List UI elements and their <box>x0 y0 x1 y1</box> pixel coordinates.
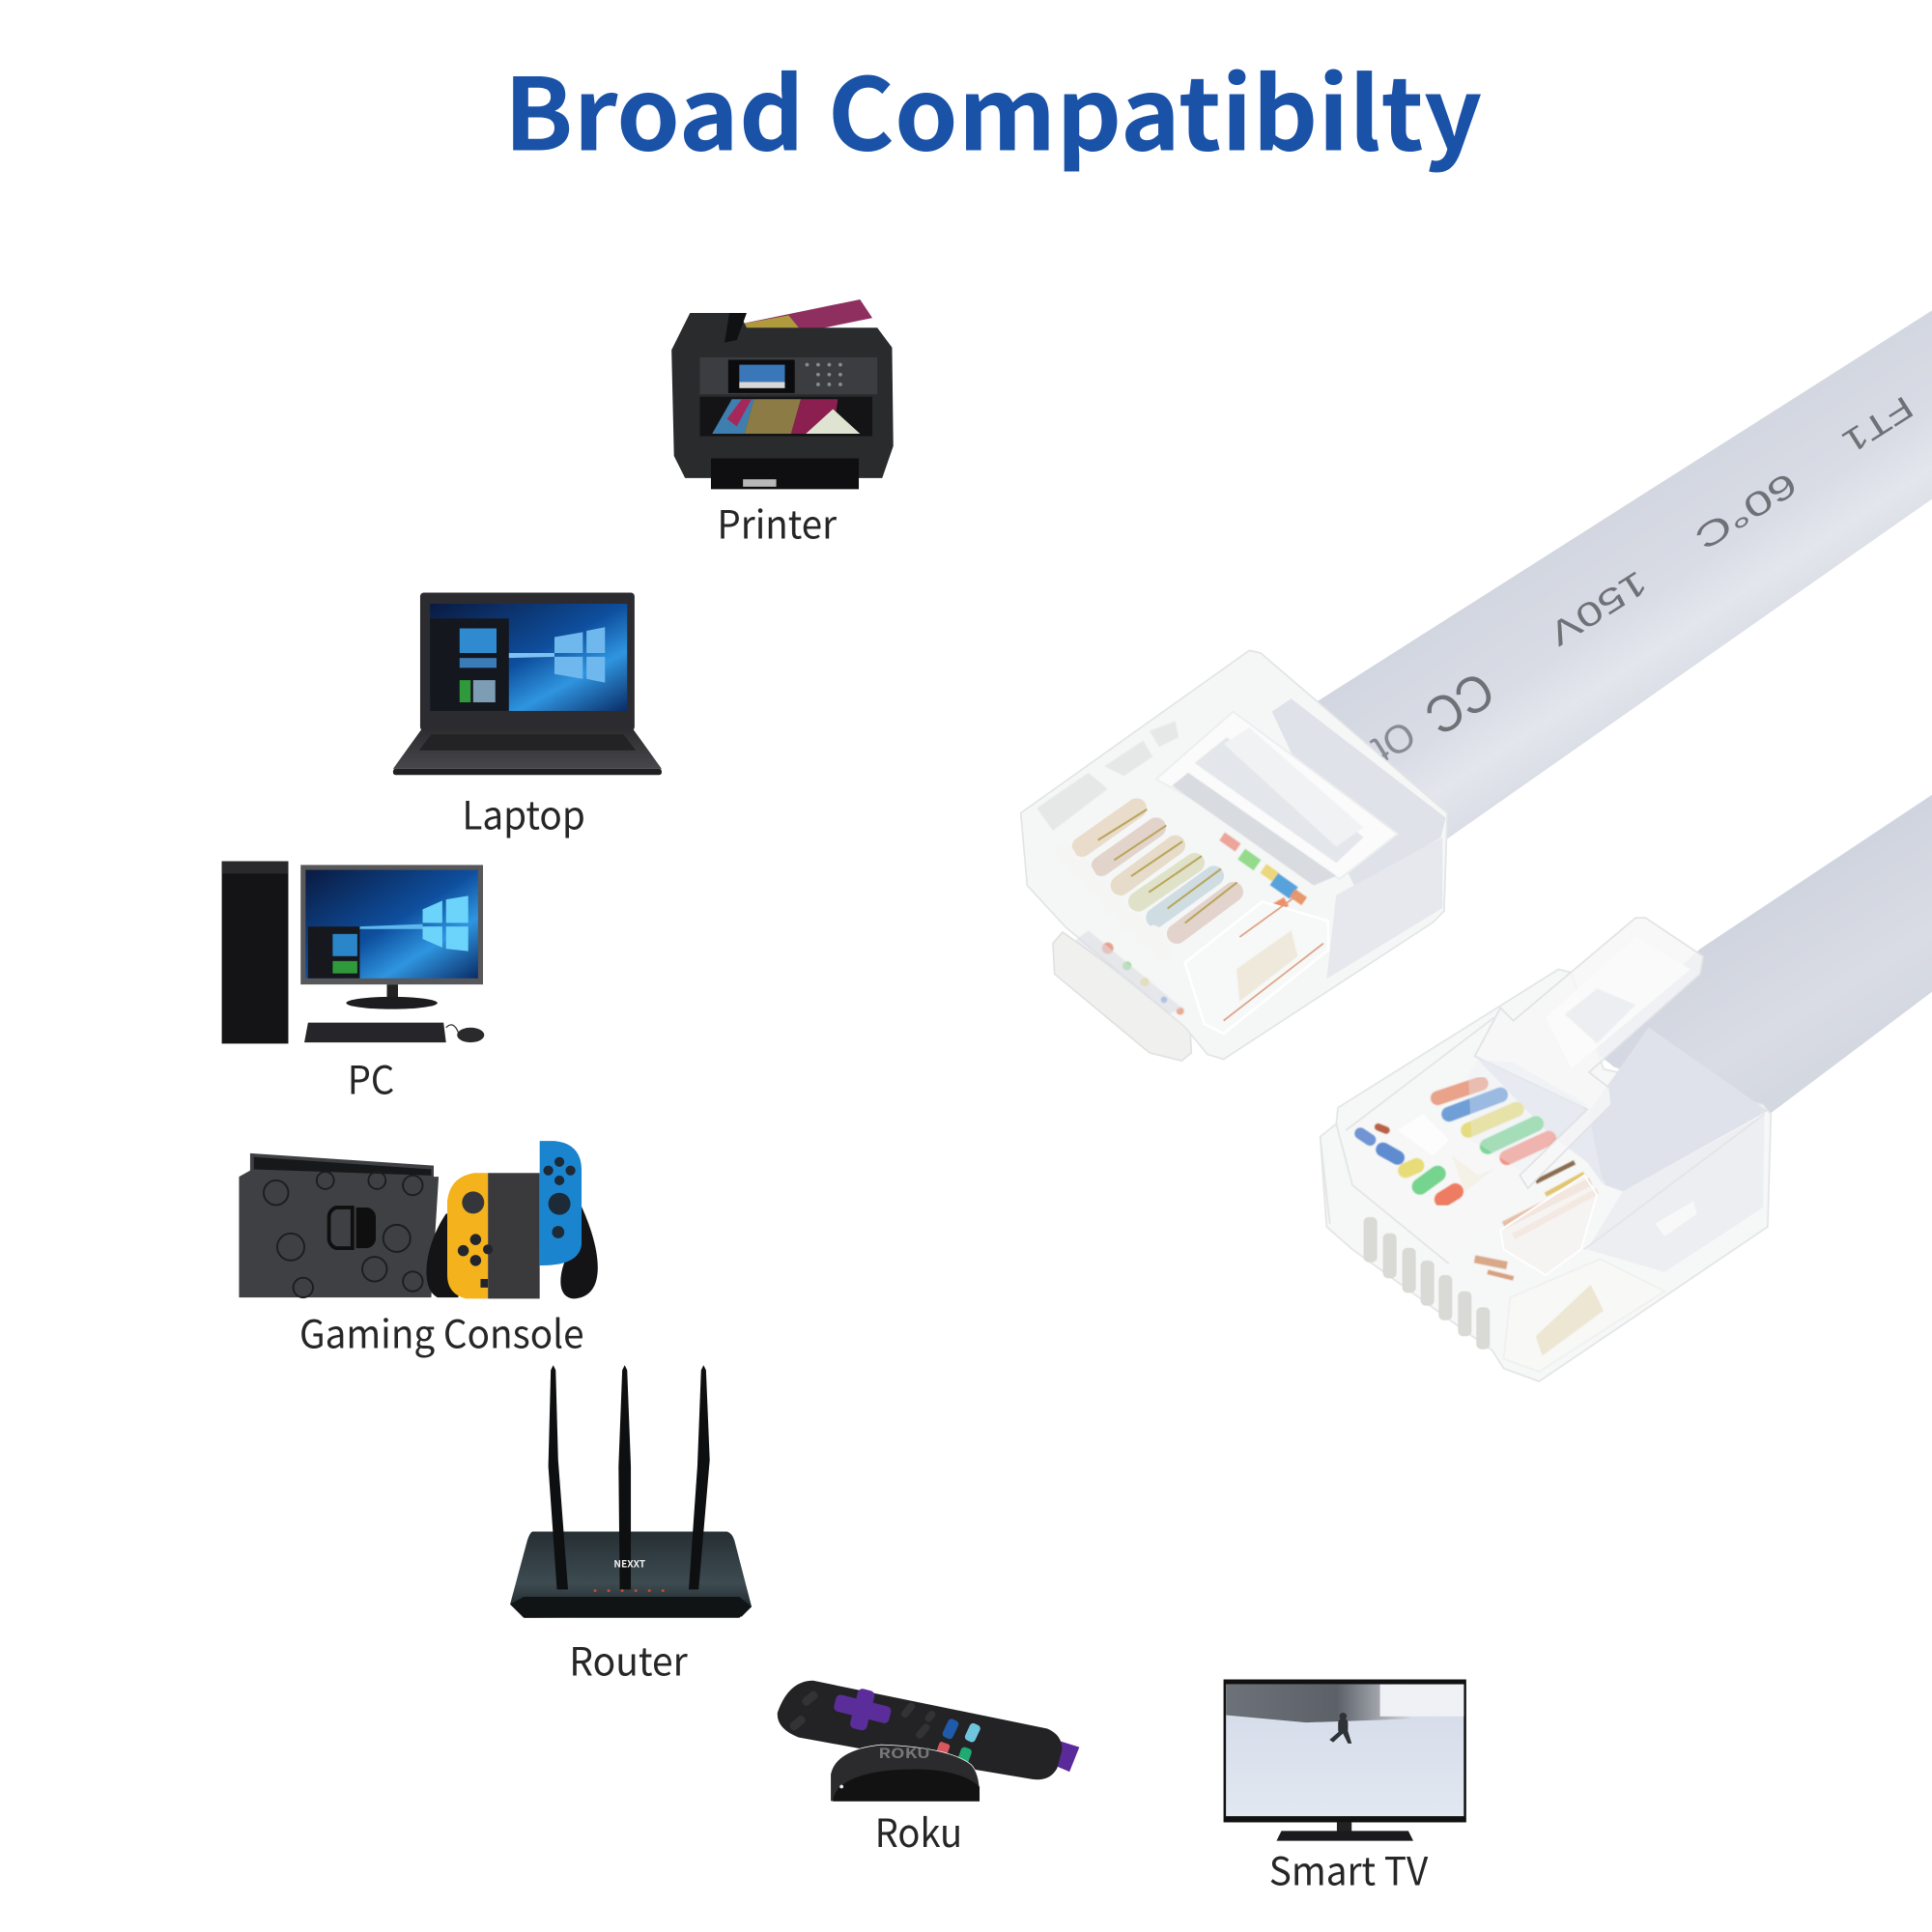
cable printed mark: CC: CC <box>1415 660 1504 745</box>
device: smart tv <box>1224 1680 1466 1897</box>
pc stand <box>387 984 398 1001</box>
console dock <box>239 1153 439 1297</box>
plug latch <box>1475 918 1703 1188</box>
cable printed mark: partly hidden: Ot <box>1364 712 1424 772</box>
cable printed text: 150V: 150V <box>1542 563 1654 652</box>
tv label: Smart TV <box>1269 1840 1429 1897</box>
plug bottom corner <box>1504 1259 1664 1372</box>
pc keyboard <box>304 1023 446 1042</box>
roku remote <box>778 1681 1062 1779</box>
pc tower <box>222 862 288 1043</box>
upper RJ45 plug <box>1021 650 1447 1061</box>
printer body <box>671 313 894 478</box>
console label: Gaming Console <box>299 1302 584 1359</box>
plug outlines <box>1321 1017 1765 1264</box>
console grip left <box>426 1213 458 1297</box>
device: roku: ROKU <box>878 1744 930 1763</box>
router label: Router <box>569 1631 688 1688</box>
cable printed text: 60C: 60°C <box>1688 465 1804 556</box>
plug contact channels <box>1082 809 1234 934</box>
plug left corner patches <box>1037 722 1179 831</box>
plug white window <box>1398 1114 1449 1156</box>
console blue joy-con <box>540 1141 582 1265</box>
tv stand <box>1337 1822 1351 1833</box>
plug rear section showing cable <box>1272 698 1446 889</box>
device: roku <box>778 1681 1079 1859</box>
upper flat cable <box>1306 310 1932 842</box>
pc label: PC <box>348 1049 394 1106</box>
device: printer <box>671 299 894 550</box>
laptop base <box>393 729 662 769</box>
roku box <box>831 1745 980 1802</box>
router logo: NEXXT <box>613 1555 646 1570</box>
lower flat cable <box>1589 795 1932 1115</box>
console center <box>488 1173 540 1298</box>
plug body <box>1321 969 1771 1381</box>
tv frame <box>1224 1680 1466 1822</box>
console yellow joy-con <box>447 1173 488 1298</box>
device: gaming console <box>239 1141 598 1359</box>
console grip right <box>560 1202 598 1298</box>
printer label: Printer <box>717 493 837 550</box>
plug rear face <box>1587 1114 1765 1272</box>
plug contact fronts <box>1054 839 1176 964</box>
roku label: Roku <box>875 1802 962 1859</box>
plug gold contacts <box>1098 810 1236 923</box>
plug bottom teeth <box>1364 1217 1490 1350</box>
laptop screen <box>430 604 627 711</box>
plug body <box>1021 650 1447 1060</box>
printer tray <box>711 458 859 489</box>
printer output paper <box>699 397 872 437</box>
router body <box>510 1531 752 1618</box>
printer paper <box>734 299 872 341</box>
console logo <box>329 1208 353 1248</box>
plug wires <box>1075 833 1307 1015</box>
pc mouse <box>446 1025 458 1033</box>
router leds <box>594 1589 665 1592</box>
tv skier <box>1329 1713 1351 1744</box>
plug lower flap <box>1500 1176 1597 1275</box>
device: router <box>510 1365 752 1688</box>
tv screen <box>1226 1685 1463 1816</box>
plug tab <box>1053 932 1191 1061</box>
cable printed text: FT1: FT1 <box>1835 388 1919 460</box>
laptop lid <box>420 593 635 730</box>
pc monitor <box>300 865 483 984</box>
plug gold wires <box>1475 1162 1597 1278</box>
router antennas <box>549 1365 710 1589</box>
plug colored wires <box>1360 1084 1548 1200</box>
plug top window <box>1156 712 1398 879</box>
roku tag <box>1052 1741 1079 1772</box>
device: laptop <box>393 593 662 840</box>
plug front lip <box>1350 1118 1533 1264</box>
title: Broad Compatibilty <box>504 35 1482 180</box>
printer control panel <box>699 357 877 394</box>
plug cable inside <box>1587 1027 1768 1191</box>
laptop label: Laptop <box>462 783 585 840</box>
roku buttons <box>788 1690 937 1740</box>
roku dpad <box>833 1688 892 1731</box>
device: pc <box>222 862 484 1106</box>
lower RJ45 plug <box>1321 918 1771 1381</box>
plug front lower face <box>1185 901 1328 1034</box>
